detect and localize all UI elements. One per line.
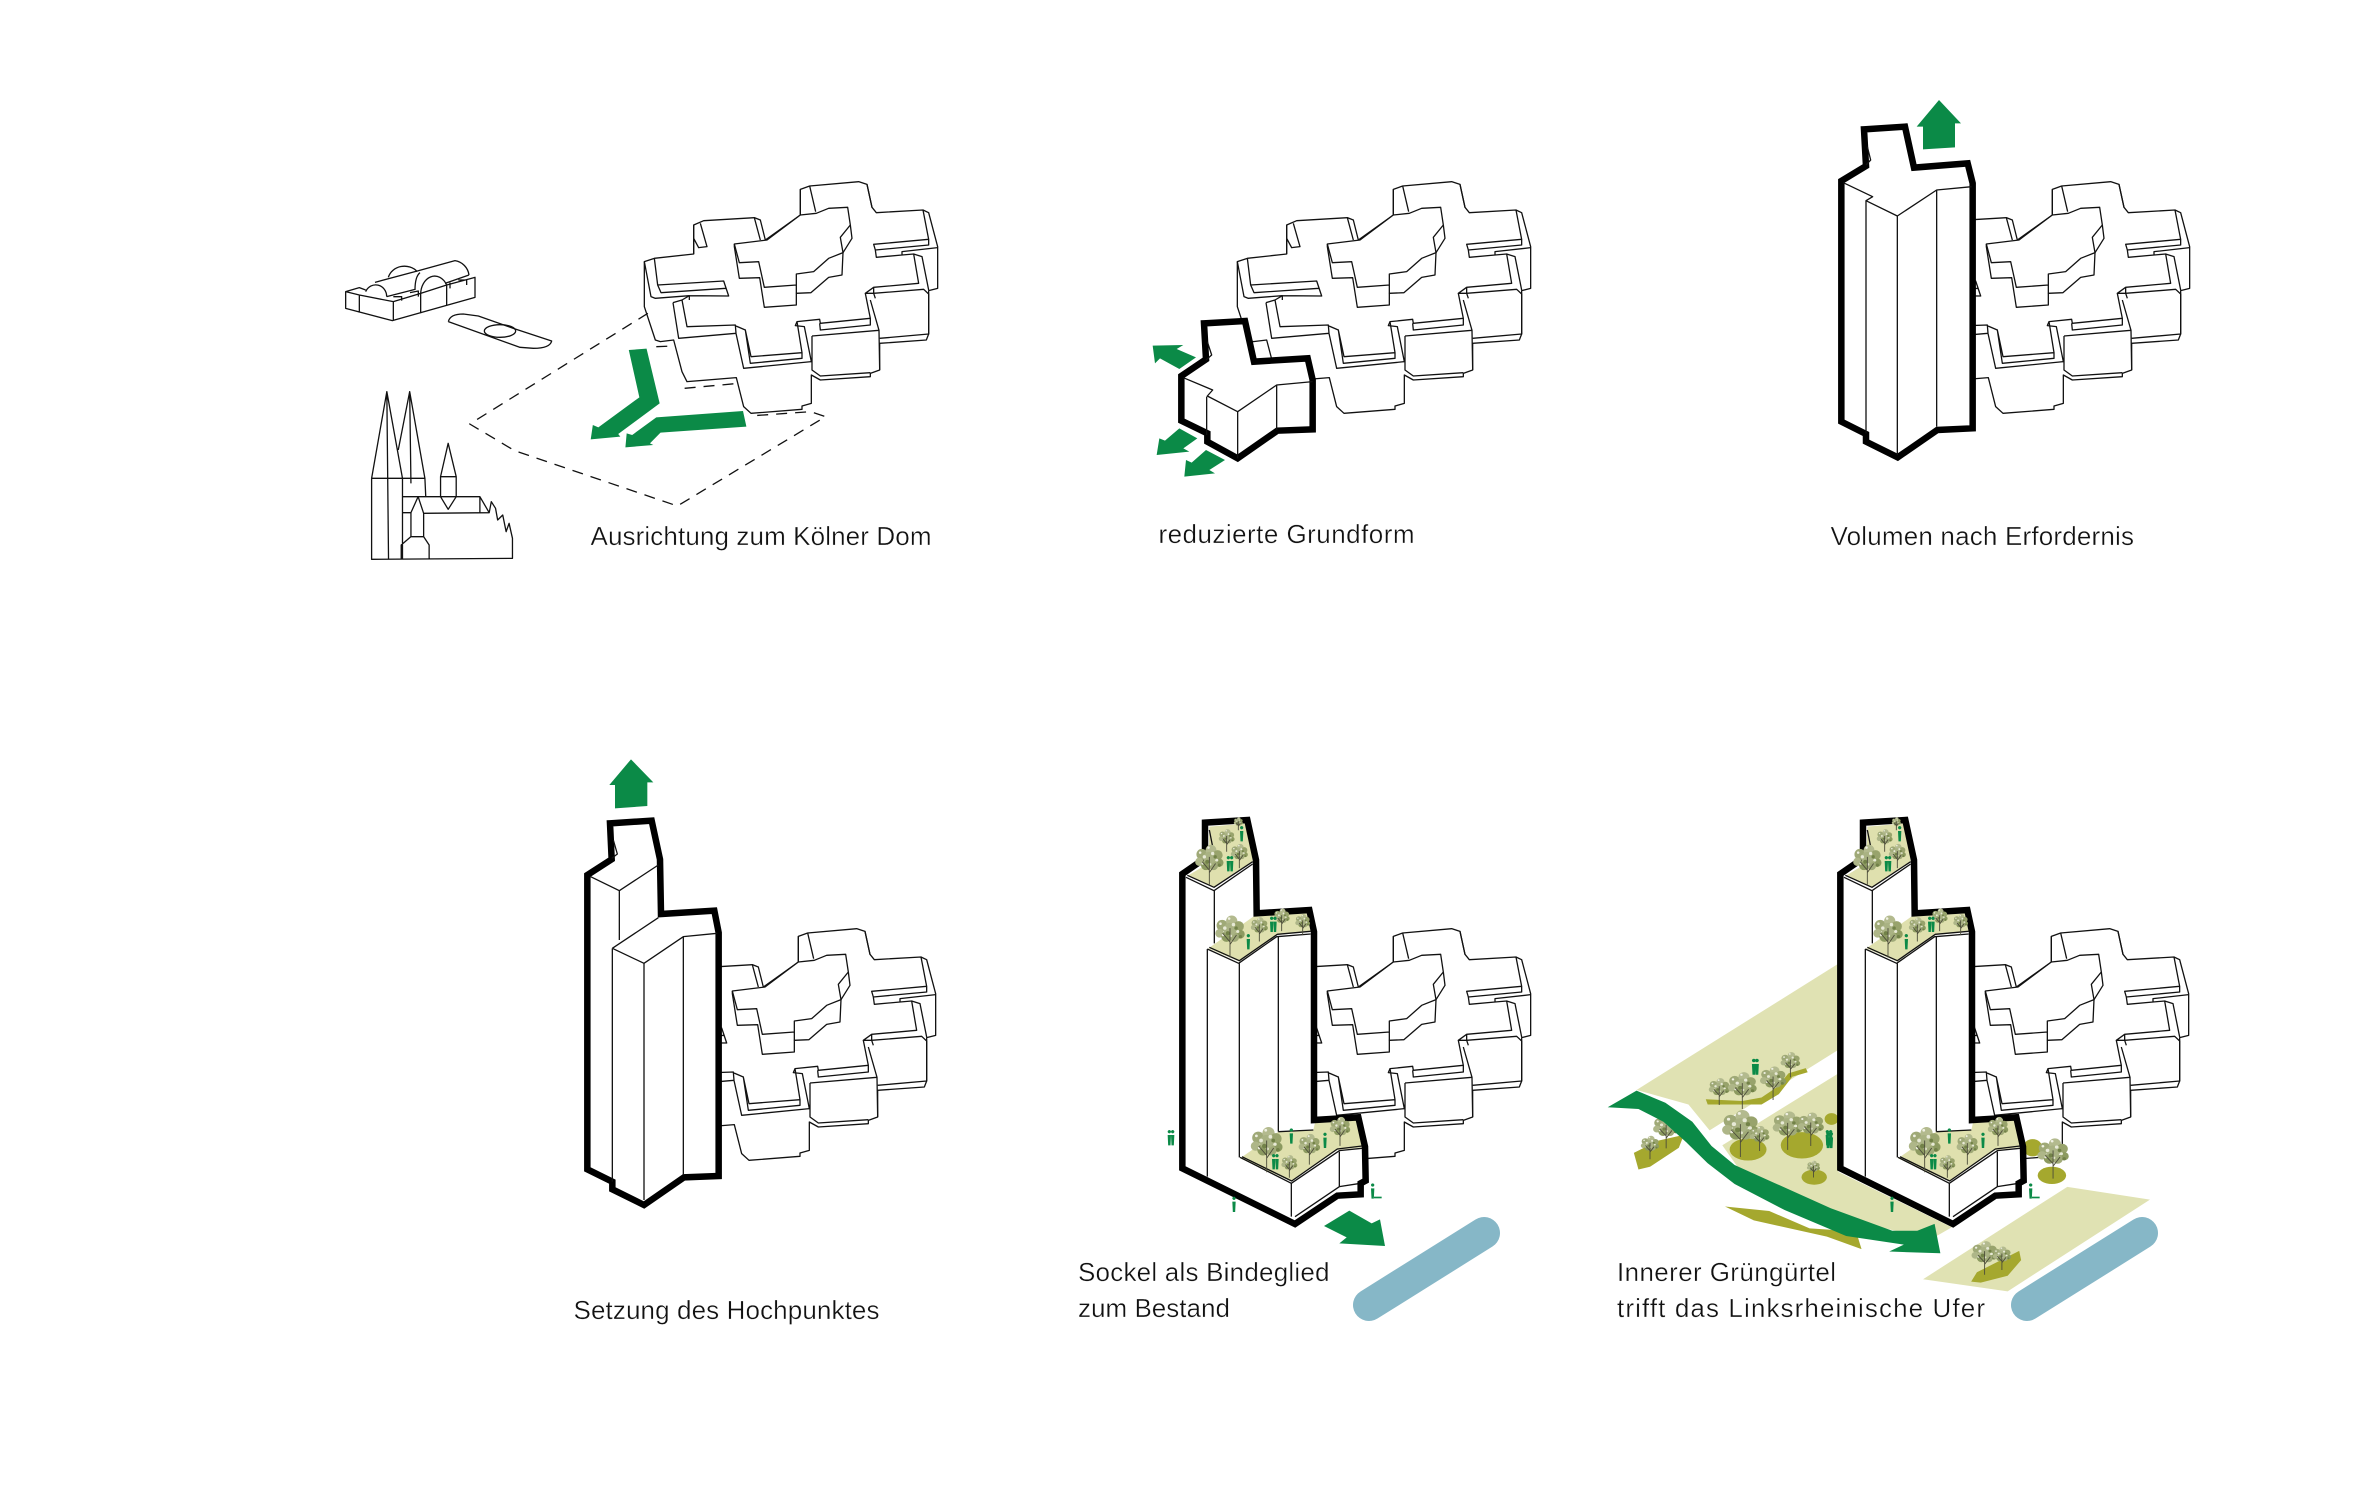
icon: church floor plan bbox=[448, 314, 552, 348]
green tower with planted terraces bbox=[1168, 817, 1382, 1224]
green outward arrows bbox=[1153, 345, 1225, 477]
green belt sweeping arrow bbox=[1608, 1091, 1940, 1253]
panel: Setzung des Hochpunktes bbox=[574, 759, 936, 1325]
green tower with planted terraces bbox=[1826, 817, 2040, 1224]
existing building complex bbox=[1896, 182, 2190, 413]
icon: historic church building bbox=[346, 261, 475, 321]
caption: Ausrichtung: Ausrichtung zum Kölner Dom bbox=[590, 521, 932, 551]
green orientation arrows bbox=[591, 349, 746, 447]
planting islands bbox=[1634, 1068, 2021, 1283]
green belt ground bbox=[1637, 964, 2150, 1291]
panel: Volumen nach Erfordernis bbox=[1830, 100, 2190, 551]
panel: Innerer Grüngürtel bbox=[1608, 817, 2189, 1323]
stepped high-rise volume bbox=[587, 821, 719, 1205]
icon: Kölner Dom cathedral bbox=[372, 392, 512, 559]
caption: Setzung: Setzung des Hochpunktes bbox=[574, 1295, 880, 1325]
caption: Innerer Grüngürtel: Innerer Grüngürtel bbox=[1617, 1257, 1836, 1287]
panel: Ausrichtung zum Kölner Dom bbox=[346, 182, 938, 559]
existing building complex bbox=[1237, 182, 1531, 413]
existing building complex bbox=[644, 182, 938, 413]
caption: Sockel: Sockel als Bindeglied bbox=[1078, 1257, 1330, 1287]
bed behind tower bbox=[2023, 1139, 2042, 1156]
green up arrow bbox=[609, 759, 653, 808]
tall tower volume bbox=[1841, 127, 1973, 457]
panel: reduzierte Grundform bbox=[1153, 182, 1531, 549]
caption: Volumen: Volumen nach Erfordernis bbox=[1830, 521, 2134, 551]
site orientation dashed outline bbox=[470, 313, 825, 506]
caption: zum Bestand: zum Bestand bbox=[1078, 1293, 1230, 1323]
round planting beds bbox=[1730, 1113, 2066, 1185]
existing building complex bbox=[1237, 929, 1531, 1160]
green up arrow bbox=[1917, 100, 1961, 149]
panel: Sockel als Bindeglied bbox=[1078, 817, 1531, 1323]
river bbox=[1369, 1233, 1484, 1305]
existing building complex bbox=[642, 929, 936, 1160]
caption: reduzierte Grundform: reduzierte Grundform bbox=[1158, 519, 1414, 549]
green arrow to river bbox=[1324, 1211, 1385, 1246]
thick outlined base form bbox=[1181, 321, 1313, 458]
caption: trifft das Linksrheinische Ufer: trifft das Linksrheinische Ufer bbox=[1617, 1293, 1985, 1323]
river bbox=[2027, 1233, 2142, 1305]
landscape trees bbox=[1641, 1052, 2069, 1275]
existing building complex bbox=[1895, 929, 2189, 1160]
